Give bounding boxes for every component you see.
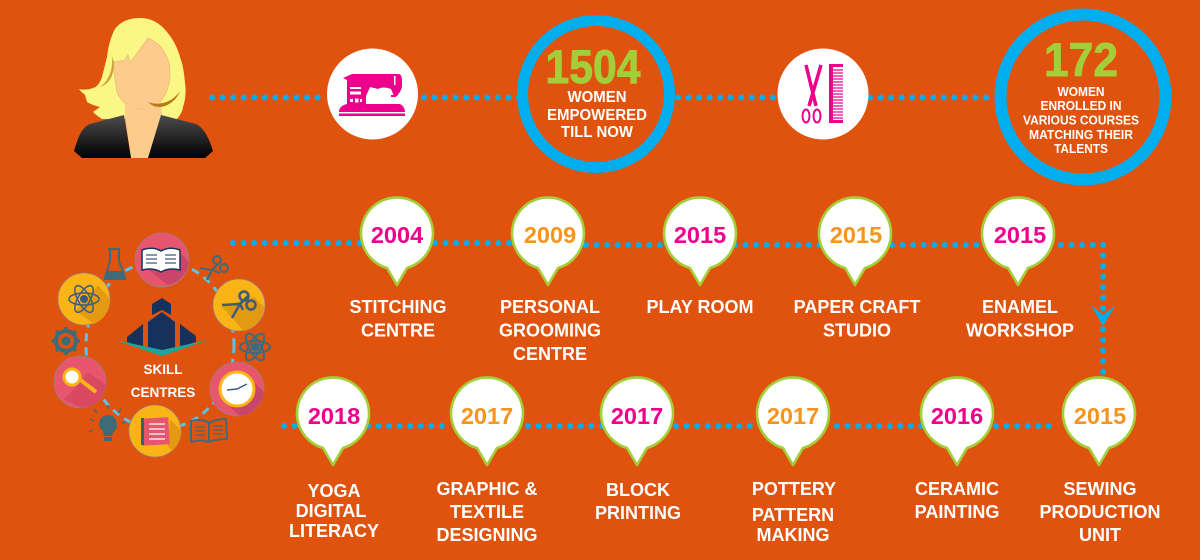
icon: scissors and comb	[778, 48, 868, 140]
label: pottery pattern making	[752, 479, 836, 545]
label: graphic and textile designing: DESIGNING	[436, 525, 538, 545]
label: personal grooming centre: PERSONAL	[500, 297, 600, 317]
stat ring: 172 women enrolled: TALENTS	[1054, 141, 1108, 156]
icon: scissors outline	[200, 256, 228, 280]
label: enamel workshop	[966, 297, 1074, 340]
pin: 2018 yoga	[297, 377, 369, 465]
icon: building logo	[115, 298, 208, 356]
icon: light bulb	[89, 405, 126, 441]
stat ring: 1504 women empowered: 1504	[546, 40, 640, 93]
icon: book badge	[135, 233, 189, 287]
icon: woman with blonde hair	[74, 18, 213, 158]
pin: 2015 sewing	[1063, 377, 1135, 465]
pin: 2018 yoga: 2018	[308, 403, 360, 429]
stat ring: 172 women enrolled: MATCHING THEIR	[1029, 127, 1134, 142]
icon: atom outline	[240, 331, 270, 363]
pin: 2015 play room	[664, 197, 736, 285]
pin: 2017 graphic	[451, 377, 523, 465]
label: block printing: PRINTING	[595, 503, 681, 523]
label: ceramic painting: PAINTING	[915, 502, 999, 522]
dotted connector: top row	[212, 94, 995, 100]
pin: 2015 sewing: 2015	[1074, 403, 1126, 429]
pin: 2016 ceramic: 2016	[931, 403, 983, 429]
icon: clock badge	[210, 362, 264, 416]
pin: 2016 ceramic	[921, 377, 993, 465]
label: personal grooming centre: CENTRE	[513, 344, 587, 364]
label: stitching centre: STITCHING	[350, 297, 446, 317]
hub label: CENTRES	[131, 385, 195, 400]
label: yoga digital literacy: LITERACY	[289, 521, 379, 541]
label: graphic and textile designing: TEXTILE	[450, 502, 524, 522]
icon: flask outline	[105, 249, 125, 279]
label: yoga digital literacy: YOGA	[307, 481, 361, 501]
icon: atom badge	[58, 273, 110, 325]
stat ring: 1504 women empowered: TILL NOW	[561, 124, 633, 141]
dashed ring	[86, 261, 234, 429]
label: sewing production unit: UNIT	[1079, 525, 1121, 545]
label: paper craft studio: STUDIO	[823, 320, 891, 340]
stat ring: 1504 women empowered: EMPOWERED	[547, 107, 647, 124]
label: yoga digital literacy: DIGITAL	[296, 501, 366, 521]
label: paper craft studio	[794, 297, 920, 340]
icon: notebook badge	[129, 405, 181, 457]
pin: 2004 stitching centre: 2004	[371, 222, 423, 248]
pin: 2015 enamel workshop	[982, 197, 1054, 285]
stat ring: 172 women enrolled: ENROLLED IN	[1040, 98, 1122, 113]
icon: scissors badge	[213, 279, 265, 331]
label: stitching centre	[350, 297, 446, 340]
label: yoga digital literacy	[289, 481, 379, 541]
label: enamel workshop: WORKSHOP	[966, 320, 1074, 340]
pin: 2017 graphic: 2017	[461, 403, 513, 429]
stat ring: 1504 women empowered	[522, 20, 670, 168]
pin: 2009 personal grooming: 2009	[524, 222, 576, 248]
stat ring: 1504 women empowered: WOMEN	[568, 89, 626, 106]
dotted connector: middle row	[233, 243, 1103, 373]
icon: gear	[52, 327, 80, 355]
label: personal grooming centre: GROOMING	[499, 320, 601, 340]
label: ceramic painting: CERAMIC	[915, 479, 999, 499]
pin: 2017 block printing	[601, 377, 673, 465]
dotted connector: bottom row	[284, 423, 1050, 429]
label: graphic and textile designing	[436, 479, 538, 545]
label: sewing production unit: PRODUCTION	[1040, 502, 1160, 522]
pin: 2015 enamel workshop: 2015	[994, 222, 1046, 248]
label: graphic and textile designing: GRAPHIC &	[436, 479, 538, 499]
pin: 2015 paper craft	[819, 197, 891, 285]
label: sewing production unit	[1040, 479, 1160, 545]
label: play room: PLAY ROOM	[646, 297, 754, 317]
arrow head: downward	[1091, 305, 1115, 326]
label: block printing	[595, 480, 681, 523]
hub label	[131, 362, 195, 400]
pin: 2015 paper craft: 2015	[830, 222, 882, 248]
label: ceramic painting	[915, 479, 999, 522]
pin: 2017 block printing: 2017	[611, 403, 663, 429]
label: block printing: BLOCK	[606, 480, 670, 500]
pin: 2004 stitching centre	[361, 197, 433, 285]
stat ring: 172 women enrolled	[1000, 14, 1166, 180]
label: pottery pattern making: MAKING	[756, 525, 830, 545]
label: paper craft studio: PAPER CRAFT	[794, 297, 920, 317]
label: sewing production unit: SEWING	[1063, 479, 1137, 499]
label: pottery pattern making: POTTERY	[752, 479, 836, 499]
icon: open book outline	[191, 419, 227, 442]
icon: sewing machine	[327, 48, 418, 140]
label: personal grooming centre	[499, 297, 601, 364]
stat ring: 172 women enrolled: 172	[1044, 33, 1118, 86]
label: stitching centre: CENTRE	[361, 320, 435, 340]
stat ring: 172 women enrolled: VARIOUS COURSES	[1023, 112, 1139, 128]
stat ring: 172 women enrolled: WOMEN	[1058, 84, 1104, 99]
label: pottery pattern making: PATTERN	[752, 505, 834, 525]
pin: 2017 pottery	[757, 377, 829, 465]
hub label: SKILL	[144, 362, 182, 377]
pin: 2009 personal grooming	[512, 197, 584, 285]
skill centres hub	[52, 233, 270, 457]
pin: 2015 play room: 2015	[674, 222, 726, 248]
label: enamel workshop: ENAMEL	[982, 297, 1058, 317]
icon: magnifier badge	[54, 356, 106, 408]
pin: 2017 pottery: 2017	[767, 403, 819, 429]
